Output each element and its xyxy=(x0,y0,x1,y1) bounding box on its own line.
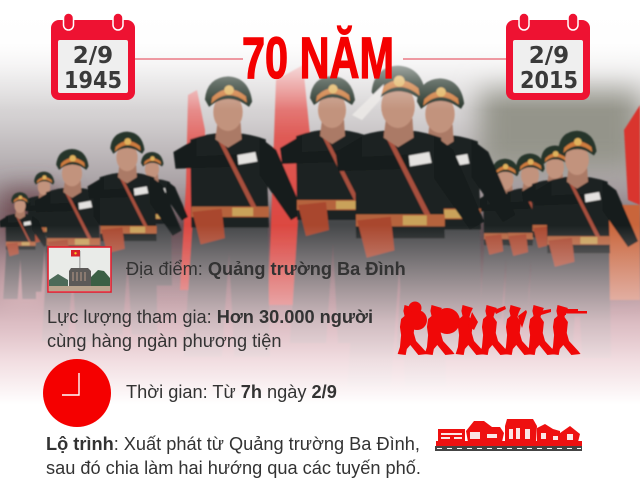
text: route line 1: Lộ trình: Xuất phát từ Quảng trường Ba Đình, xyxy=(46,434,420,454)
connector line left xyxy=(135,58,243,60)
back row soldiers xyxy=(21,172,76,292)
bottom white fade xyxy=(0,225,640,420)
flags xyxy=(180,90,205,290)
middle soldiers xyxy=(35,149,124,341)
calendar date text: 2/9 xyxy=(529,43,569,69)
icon: clock xyxy=(43,359,111,427)
icon: marching band silhouettes xyxy=(398,302,587,355)
calendar 1945 xyxy=(51,13,135,100)
calendar year text: 2015 xyxy=(520,68,578,94)
title: 70 NĂM xyxy=(242,26,394,91)
text: forces line 2: cùng hàng ngàn phương tiện xyxy=(47,331,281,351)
calendar 2015 xyxy=(506,13,590,100)
front soldiers xyxy=(173,76,304,357)
icon: Ho Chi Minh mausoleum thumbnail xyxy=(48,247,111,292)
text: forces line 1: Lực lượng tham gia: Hơn 30.000 người xyxy=(47,307,373,327)
calendar date text: 2/9 xyxy=(73,43,113,69)
raised salute arm xyxy=(352,84,384,120)
calendar year text: 1945 xyxy=(64,68,122,94)
text: time: Thời gian: Từ 7h ngày 2/9 xyxy=(126,382,337,402)
tree line and crowd haze xyxy=(0,85,640,305)
connector line right xyxy=(403,58,507,60)
top white fade xyxy=(0,0,640,110)
text: location: Địa điểm: Quảng trường Ba Đình xyxy=(126,259,406,279)
icon: town street xyxy=(435,419,582,451)
text: route line 2: sau đó chia làm hai hướng qua các tuyến phố. xyxy=(46,458,421,478)
